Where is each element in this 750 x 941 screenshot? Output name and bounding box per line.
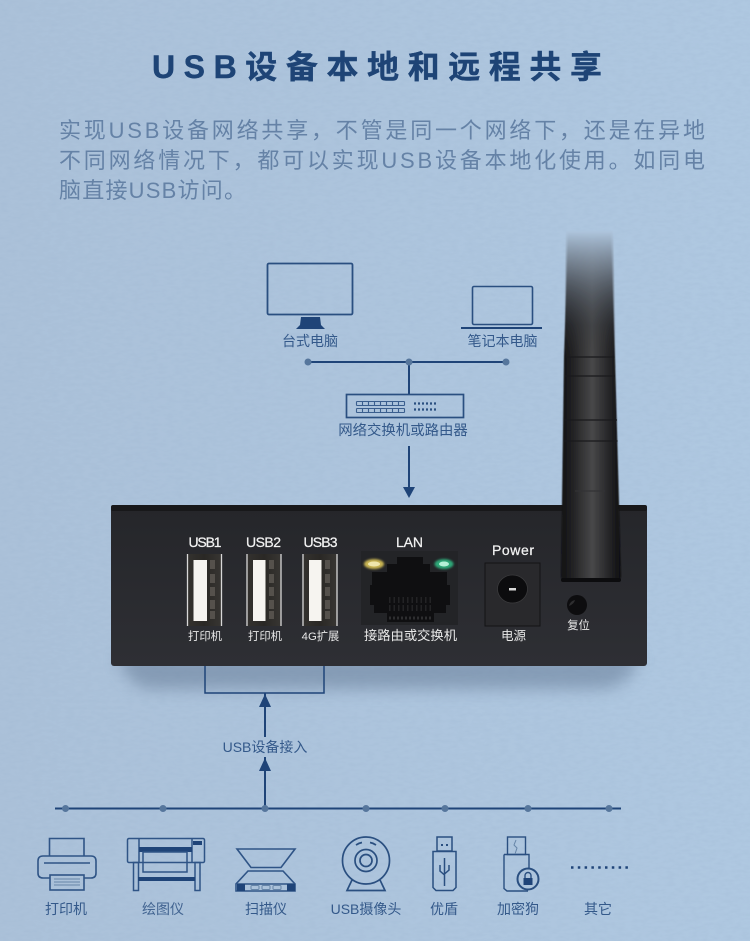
port labels: USB1 xyxy=(188,534,222,550)
port captions: 4G扩展 xyxy=(302,629,339,643)
icon: scanner xyxy=(236,849,295,891)
port labels: Power xyxy=(492,542,534,558)
intro text block: 实现USB设备网络共享，不管是同一个网络下，还是在异地 xyxy=(59,118,705,143)
port captions: 电源 xyxy=(501,629,526,643)
antenna xyxy=(561,231,621,582)
USB port 3 xyxy=(302,554,338,626)
icon: webcam xyxy=(342,837,390,890)
LAN port xyxy=(361,551,458,625)
icon: plotter xyxy=(128,838,204,890)
USB device bus xyxy=(55,805,621,812)
icon: desktop computer xyxy=(268,264,352,329)
label: flash drive: 优盾 xyxy=(430,901,458,917)
label: scanner: 扫描仪 xyxy=(245,901,287,917)
icon: encrypted dongle xyxy=(504,837,538,891)
port labels: USB2 xyxy=(246,534,281,550)
network connector xyxy=(304,358,510,395)
icon: printer xyxy=(38,838,96,890)
port captions: 打印机 xyxy=(248,629,283,643)
title: USB设备本地和远程共享 xyxy=(152,49,602,85)
port captions xyxy=(188,618,590,643)
label: plotter: 绘图仪 xyxy=(142,901,184,917)
label: desktop: 台式电脑 xyxy=(282,333,338,349)
port captions: 打印机 xyxy=(188,629,223,643)
USB port 2 xyxy=(246,554,282,626)
icon: more dots xyxy=(571,866,631,869)
power jack xyxy=(485,563,540,626)
intro text block xyxy=(59,118,705,203)
reset button xyxy=(567,595,587,615)
port captions: 接路由或交换机 xyxy=(364,627,457,643)
label: switch: 网络交换机或路由器 xyxy=(338,421,468,439)
label: USB access: USB设备接入 xyxy=(223,739,307,755)
arrow: switch to device xyxy=(403,446,415,498)
port labels: USB3 xyxy=(304,534,338,550)
label: printer: 打印机 xyxy=(45,901,87,917)
port labels: LAN xyxy=(396,534,423,550)
device panel xyxy=(111,505,647,666)
intro text block: 脑直接USB访问。 xyxy=(59,178,246,203)
port labels xyxy=(188,534,534,558)
USB port 1 xyxy=(187,554,222,626)
label: others: 其它 xyxy=(584,901,612,917)
label: webcam: USB摄像头 xyxy=(331,901,401,917)
label: laptop: 笔记本电脑 xyxy=(468,333,538,349)
port captions: 复位 xyxy=(567,618,590,632)
icon: network switch xyxy=(346,394,464,418)
arrowheads xyxy=(259,694,271,771)
icon: USB flash drive xyxy=(433,837,456,890)
label: dongle: 加密狗 xyxy=(497,901,539,917)
USB bracket and arrows xyxy=(205,666,324,808)
icon: laptop xyxy=(461,286,542,329)
intro text block: 不同网络情况下，都可以实现USB设备本地化使用。如同电 xyxy=(59,148,705,173)
device shadow xyxy=(118,655,640,689)
